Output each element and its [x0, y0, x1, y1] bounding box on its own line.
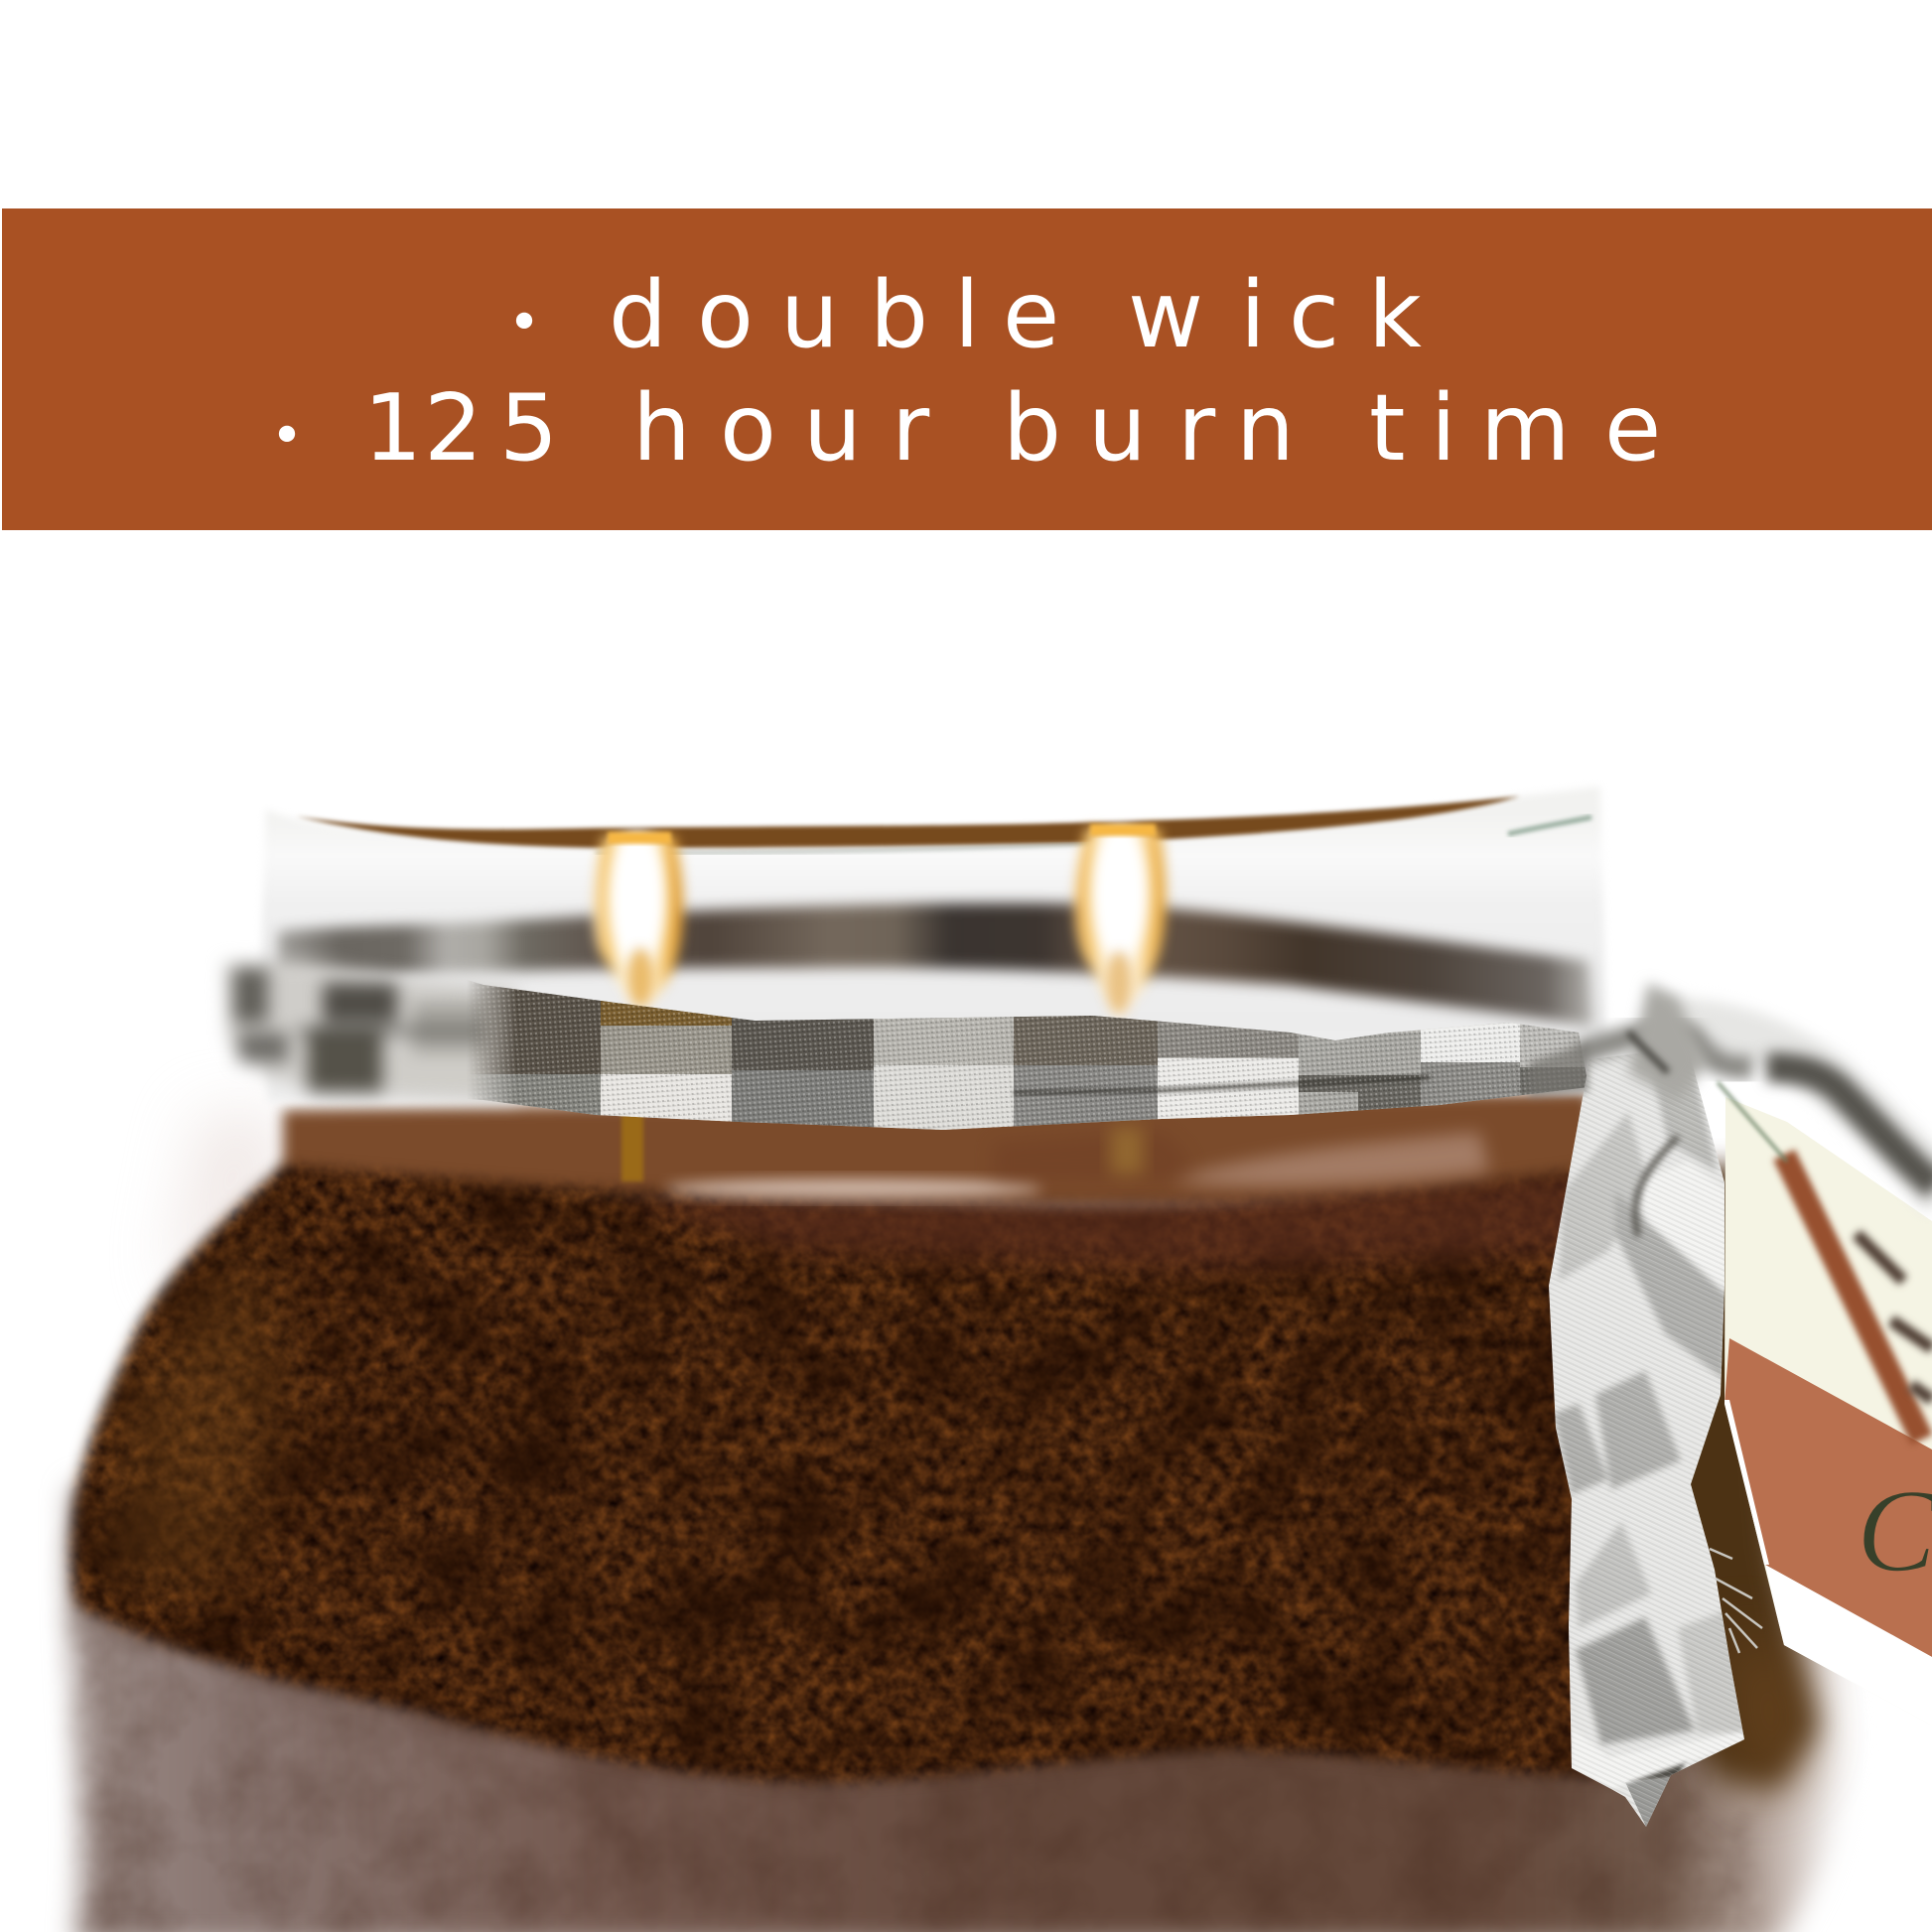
banner: features [2, 208, 1932, 530]
card tag [1725, 1097, 1932, 1682]
flame right [1075, 824, 1167, 1018]
tag illustration marks [1857, 1234, 1932, 1400]
ribbon knot and loose end [1529, 983, 1932, 1236]
fold line [1014, 1077, 1430, 1093]
mottled wax [60, 1156, 1600, 1791]
jar lower body [0, 1172, 1932, 1932]
gingham ribbon band [469, 981, 1587, 1130]
glass neck [260, 786, 1606, 1102]
dark fabric reflection band [278, 903, 1592, 1027]
text: double wick: • [507, 291, 541, 355]
wax highlights [665, 1132, 1489, 1198]
lower checks [475, 1058, 1587, 1130]
jar rim line [296, 796, 1591, 853]
text: 125 hour burn time: 125 hour burn time [363, 374, 1661, 482]
upper checks [471, 981, 1579, 1075]
candle photo [0, 786, 1932, 1932]
ribbon hanging tail [1549, 1054, 1744, 1827]
icon: wick right [1110, 1127, 1144, 1174]
text: double wick: double wick [609, 261, 1422, 368]
ribbon frayed threads [1710, 1549, 1762, 1653]
clear wax and glass halo [169, 1092, 1608, 1301]
cinnamon stick [1784, 1155, 1922, 1440]
flame left [593, 831, 683, 1008]
gingham ribbon blurred left end [224, 961, 516, 1102]
icon: wick left [621, 1114, 643, 1181]
text: 125 hour burn time: • [270, 404, 304, 469]
